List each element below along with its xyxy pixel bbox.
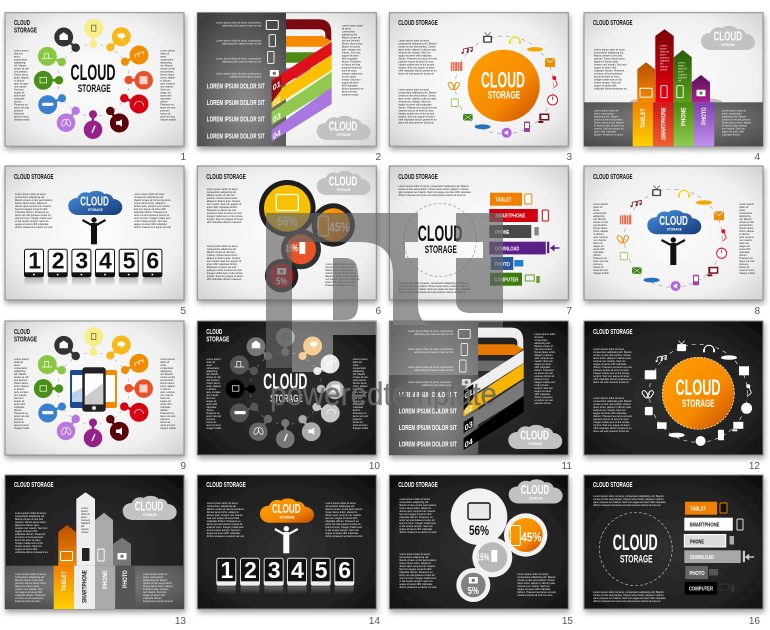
panel: slide 6 percentage circles <box>197 166 376 300</box>
ribbon number 01: 01 <box>465 387 473 401</box>
cloud badge: CLOUD <box>135 498 163 514</box>
number 16: 16 <box>749 616 760 627</box>
circle 45 percent <box>312 203 355 247</box>
columns <box>633 102 714 146</box>
numbered tablets: 6 <box>338 557 351 583</box>
person <box>274 526 298 553</box>
cloud badge <box>508 425 562 449</box>
panel: slide 3 orange circle <box>389 13 568 146</box>
bar phone <box>684 534 734 547</box>
icon ring <box>616 186 727 291</box>
panel: slide 11 dark ribbons <box>389 321 568 455</box>
heading line 2: STORAGE <box>14 28 37 35</box>
bar tablet: TABLET <box>690 506 706 512</box>
column labels <box>640 107 708 140</box>
circle 15 percent <box>281 229 321 269</box>
number 4: 4 <box>754 152 760 163</box>
device icons <box>266 20 279 76</box>
heading: CLOUD STORAGE <box>398 482 438 489</box>
heading: CLOUD STORAGE <box>593 329 633 336</box>
bar phone: PHONE <box>690 540 704 546</box>
cloud badge: CLOUD <box>521 482 549 497</box>
number 9: 9 <box>180 461 186 472</box>
column labels <box>61 570 129 603</box>
circle 15 percent: 15% <box>285 243 298 254</box>
bar photo: PHOTO <box>495 262 510 268</box>
captions: adipiscing elit mauris ornare at nisi <box>414 351 453 354</box>
column labels: PHONE <box>681 107 688 126</box>
captions: adipiscing elit mauris ornare at nisi <box>222 60 261 63</box>
dashed circle <box>599 512 672 586</box>
center subtitle: STORAGE <box>270 393 303 405</box>
numbered tablets: 4 <box>291 557 304 583</box>
captions: Lorem ipsum dolor sit amet, consectetur <box>408 381 453 384</box>
bottom band <box>584 102 763 146</box>
cloud badge: STORAGE <box>143 513 157 517</box>
circle 15 percent <box>472 537 512 577</box>
person <box>661 237 686 265</box>
heading: CLOUD STORAGE <box>593 20 633 27</box>
numbered tablets: 3 <box>268 557 280 583</box>
watermark grey field <box>266 213 503 368</box>
bar computer <box>490 273 540 286</box>
ring of bubbles <box>35 20 152 138</box>
bubble icons <box>40 334 148 441</box>
numbered tablets: 2 <box>244 557 257 583</box>
label 1: LOREM IPSUM DOLOR SIT <box>207 84 265 91</box>
panel: slide 12 dark orange circle <box>584 321 763 455</box>
cloud badge: STORAGE <box>337 188 351 192</box>
arrow captions <box>660 45 687 88</box>
number 12: 12 <box>749 461 760 472</box>
circle 56 percent <box>259 180 316 237</box>
circle 56 percent <box>451 488 507 545</box>
bar download <box>489 242 559 254</box>
captions: adipiscing elit mauris ornare at nisi <box>222 24 261 27</box>
label 3: LOREM IPSUM DOLOR SIT <box>207 117 265 124</box>
label 2: LOREM IPSUM DOLOR SIT <box>207 100 265 107</box>
icons <box>60 548 126 561</box>
arrows <box>58 492 131 566</box>
bottom band <box>5 566 184 609</box>
bar download: DOWNLOAD <box>495 246 519 252</box>
arrow shadow <box>630 97 722 107</box>
orange circle <box>468 50 540 122</box>
ribbon number 03: 03 <box>465 419 473 433</box>
arrows <box>637 29 710 102</box>
bar phone <box>489 225 539 238</box>
bar computer <box>685 582 734 595</box>
circle title: CLOUD <box>481 67 525 92</box>
captions: Lorem ipsum dolor sit amet, consectetur <box>216 21 261 24</box>
center title: CLOUD <box>70 60 116 85</box>
heading: CLOUD STORAGE <box>14 174 54 181</box>
numbered tablets: 4 <box>99 247 112 273</box>
panel: slide 16 dark bars <box>584 475 763 609</box>
bar smartphone: SMARTPHONE <box>690 522 720 528</box>
number 2: 2 <box>375 152 381 163</box>
heading: CLOUD STORAGE <box>593 482 633 489</box>
column labels: SMARTPHONE <box>82 570 88 603</box>
circle 5 percent <box>265 259 298 292</box>
column labels: PHOTO <box>122 570 129 588</box>
label 2: LOREM IPSUM DOLOR SIT <box>399 408 457 416</box>
captions: Lorem ipsum dolor sit amet, consectetur <box>216 39 261 42</box>
circle 15 percent: 15% <box>477 552 489 563</box>
column labels: TABLET <box>61 571 68 591</box>
number 11: 11 <box>562 461 572 472</box>
heading: CLOUD STORAGE <box>206 482 246 489</box>
circle 5 percent: 5% <box>276 277 287 288</box>
bar tablet: TABLET <box>495 197 512 203</box>
ring of grey bubbles <box>227 329 343 447</box>
circle subtitle: STORAGE <box>488 90 520 102</box>
bar smartphone <box>684 518 743 531</box>
bubble icons <box>40 25 148 133</box>
captions: adipiscing elit mauris ornare at nisi <box>414 333 453 336</box>
label 4: LOREM IPSUM DOLOR SIT <box>399 442 457 449</box>
number 8: 8 <box>754 306 760 317</box>
cloud badge <box>701 26 755 50</box>
heading: CLOUD <box>14 20 30 27</box>
number 6: 6 <box>375 306 381 317</box>
circle title: CLOUD <box>676 375 720 400</box>
circle 56 percent: 56% <box>469 522 489 538</box>
bar tablet <box>490 193 532 206</box>
cloud badge: STORAGE <box>337 133 351 137</box>
circle 56 percent: 56% <box>277 213 298 229</box>
center subtitle: STORAGE <box>78 83 111 95</box>
panel: slide 5 tablets <box>5 166 184 300</box>
captions: Lorem ipsum dolor sit amet, consectetur <box>216 57 261 60</box>
bar smartphone <box>489 209 548 222</box>
captions: Lorem ipsum dolor sit amet, consectetur <box>408 348 453 351</box>
number 7: 7 <box>566 306 572 317</box>
bar photo <box>685 566 718 579</box>
numbered tablets: 1 <box>221 557 234 583</box>
title: CLOUD <box>418 221 462 246</box>
bar tablet <box>685 502 727 515</box>
panel: slide 14 dark tablets <box>197 475 376 609</box>
captions: adipiscing elit mauris ornare at nisi <box>222 42 261 45</box>
ribbon number 01: 01 <box>273 78 281 93</box>
subtitle: STORAGE <box>425 244 457 256</box>
numbered tablets: 3 <box>75 247 88 273</box>
blue cloud <box>68 191 122 215</box>
ribbon number 02: 02 <box>273 94 281 108</box>
panel: slide 1 circular cloud diagram <box>5 13 184 146</box>
orange cloud: STORAGE <box>280 516 295 520</box>
captions <box>211 21 261 77</box>
captions: Lorem ipsum dolor sit amet, consectetur <box>216 72 261 75</box>
panel: slide 13 dark arrows <box>5 475 184 609</box>
ribbon number 04: 04 <box>273 127 281 142</box>
panel: slide 8 cloud with icon ring <box>584 166 763 300</box>
ribbons <box>272 19 332 142</box>
numbered tablets <box>217 557 354 594</box>
bar phone: PHONE <box>495 230 510 236</box>
heading: CLOUD STORAGE <box>398 20 438 27</box>
column labels: PHONE <box>102 570 109 589</box>
captions: Lorem ipsum dolor sit amet, consectetur <box>408 330 453 333</box>
icon ring <box>447 32 558 138</box>
number 14: 14 <box>369 616 380 627</box>
cloud badge: STORAGE <box>529 496 543 500</box>
cloud badge <box>509 479 563 504</box>
numbered tablets <box>24 247 162 286</box>
blue cloud: CLOUD <box>659 213 688 228</box>
captions: adipiscing elit mauris ornare at nisi <box>414 369 453 372</box>
label 3: LOREM IPSUM DOLOR SIT <box>399 425 457 432</box>
blue cloud: STORAGE <box>88 208 103 212</box>
column labels: PHOTO <box>701 107 708 125</box>
numbered tablets: 1 <box>28 247 41 273</box>
label 1: LOREM IPSUM DOLOR SIT <box>399 392 457 399</box>
cloud badge <box>123 496 177 520</box>
cloud badge <box>317 171 371 195</box>
bar computer: COMPUTER <box>689 586 713 592</box>
watermark text: poweredtemplate <box>270 376 497 412</box>
ribbon number 04: 04 <box>465 436 473 450</box>
phones <box>70 367 117 412</box>
bar smartphone: SMARTPHONE <box>495 214 526 220</box>
number 3: 3 <box>566 152 572 163</box>
blue cloud: STORAGE <box>667 227 682 231</box>
column labels: TABLET <box>640 108 647 128</box>
number 10: 10 <box>369 461 380 472</box>
cloud badge: CLOUD <box>714 28 742 44</box>
circle 5 percent: 5% <box>468 586 479 597</box>
circle 45 percent <box>504 513 547 557</box>
heading line 2: STORAGE <box>206 337 230 344</box>
blue cloud <box>647 210 701 234</box>
panel: slide 10 dark bubbles <box>197 321 376 455</box>
ribbon number 03: 03 <box>273 110 281 125</box>
panel: slide 7 bars <box>389 166 568 300</box>
label 4: LOREM IPSUM DOLOR SIT <box>207 133 265 140</box>
circle 45 percent: 45% <box>521 530 542 544</box>
cloud badge: STORAGE <box>721 43 735 47</box>
captions <box>403 330 453 386</box>
bar photo <box>491 257 523 270</box>
circle subtitle: STORAGE <box>682 398 714 410</box>
orange circle <box>662 357 734 429</box>
columns <box>54 566 135 609</box>
orange cloud <box>260 499 314 523</box>
panel: slide 2 ribbons <box>197 13 376 146</box>
watermark <box>266 213 503 412</box>
cloud badge <box>317 116 371 140</box>
heading: CLOUD STORAGE <box>398 174 438 181</box>
device icons <box>458 330 471 386</box>
bar computer: COMPUTER <box>494 278 518 284</box>
watermark lower band <box>385 321 503 375</box>
number 5: 5 <box>180 306 186 317</box>
bar photo: PHOTO <box>690 571 705 577</box>
bar download: DOWNLOAD <box>690 555 714 561</box>
heading: CLOUD <box>14 329 30 336</box>
icon ring <box>641 341 752 446</box>
numbered tablets: 6 <box>146 247 159 273</box>
bubble icons <box>232 334 340 441</box>
blue cloud: CLOUD <box>80 194 109 208</box>
bar download <box>684 550 754 563</box>
heading: CLOUD STORAGE <box>593 174 633 181</box>
dark left panel <box>197 13 286 146</box>
heading: CLOUD <box>206 329 222 336</box>
ribbons <box>464 328 524 450</box>
circle 45 percent: 45% <box>329 220 350 235</box>
numbered tablets: 5 <box>123 247 136 273</box>
dashed circle <box>404 204 476 276</box>
cloud badge: CLOUD <box>520 428 549 442</box>
panel: slide 15 dark percentage circles <box>389 475 568 609</box>
panel: slide 4 arrows <box>584 13 763 146</box>
title: CLOUD <box>613 530 658 555</box>
column labels: SMARTPHONE <box>660 107 667 140</box>
watermark letter p over dark panel <box>292 321 376 372</box>
number 1: 1 <box>180 152 186 163</box>
heading line 2: STORAGE <box>14 337 37 344</box>
heading: CLOUD STORAGE <box>206 174 246 181</box>
number 15: 15 <box>562 616 573 627</box>
heading: CLOUD STORAGE <box>14 482 54 489</box>
captions: Lorem ipsum dolor sit amet, consectetur <box>408 366 453 369</box>
cloud badge: CLOUD <box>329 119 357 134</box>
subtitle: STORAGE <box>620 554 652 566</box>
number 13: 13 <box>175 616 186 627</box>
orange cloud: CLOUD <box>272 501 301 516</box>
circle 5 percent <box>456 568 490 602</box>
center title: CLOUD <box>263 369 307 394</box>
icons <box>640 86 706 98</box>
ribbon number 02: 02 <box>465 402 473 416</box>
cloud badge: STORAGE <box>528 442 543 446</box>
ring of bubbles <box>35 328 152 446</box>
numbered tablets: 2 <box>52 247 64 273</box>
cloud badge: CLOUD <box>329 174 357 188</box>
numbered tablets: 5 <box>315 557 328 583</box>
panel: slide 9 phones with bubbles <box>5 321 184 455</box>
grey left panel <box>389 321 478 455</box>
person <box>82 217 106 244</box>
